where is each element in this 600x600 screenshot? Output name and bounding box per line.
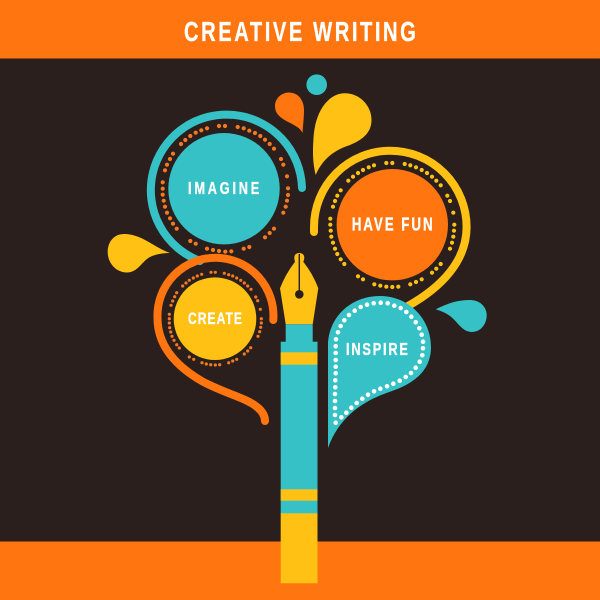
imagine label: IMAGINE <box>188 179 259 199</box>
bubble: create <box>157 258 273 421</box>
icon: large yellow drop <box>313 93 372 175</box>
bubble: inspire <box>328 296 431 448</box>
nib breather hole <box>295 290 304 299</box>
create label: CREATE <box>188 310 242 329</box>
pen nib <box>280 253 318 324</box>
inspire drop <box>328 296 431 448</box>
inspire dotted outline <box>335 303 423 423</box>
icon: teal dot <box>306 74 327 95</box>
bottom banner <box>0 542 600 600</box>
bubble: imagine <box>151 115 302 261</box>
lower yellow band <box>281 489 318 501</box>
create circle <box>174 277 256 360</box>
title: CREATIVE WRITING <box>184 17 416 48</box>
create dotted ring <box>169 272 261 365</box>
imagine ring <box>151 115 302 261</box>
have fun circle <box>337 169 448 280</box>
pen cap end <box>281 513 318 583</box>
icon: left yellow drop <box>108 234 170 272</box>
upper yellow band <box>281 352 318 365</box>
have fun dotted ring <box>330 163 454 287</box>
inspire label: INSPIRE <box>346 340 408 360</box>
fountain pen <box>280 253 318 583</box>
icon: orange drop <box>275 92 304 133</box>
have fun label: HAVE FUN <box>352 215 433 235</box>
icon: right teal drop <box>436 300 487 332</box>
imagine circle <box>168 133 280 244</box>
imagine dotted ring <box>163 126 288 252</box>
pen barrel <box>281 342 318 514</box>
create ring and tail <box>157 258 273 421</box>
top banner <box>0 0 600 58</box>
nib slit <box>299 254 300 292</box>
pen collar <box>286 324 313 342</box>
have fun ring <box>314 151 467 306</box>
bubble: have fun <box>314 151 467 306</box>
